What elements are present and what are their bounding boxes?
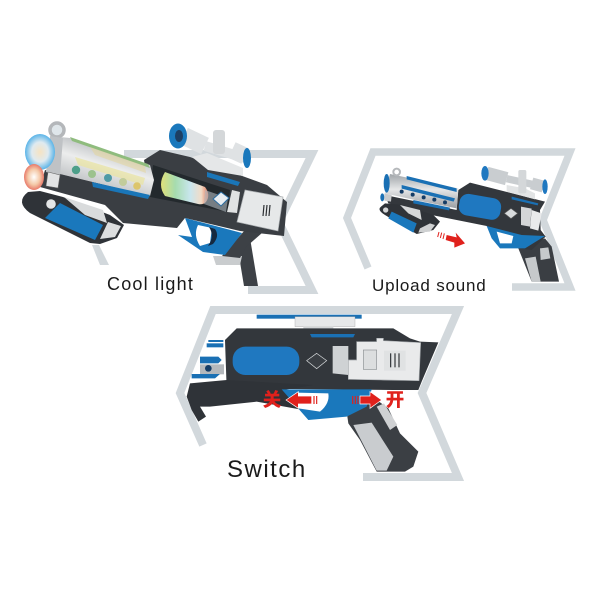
switch arrow: on	[353, 392, 382, 408]
arrow: insert direction	[438, 232, 465, 248]
label: switch: Switch	[227, 456, 307, 483]
light beam	[204, 190, 228, 212]
grip silver insert	[525, 257, 541, 282]
panel: cool light	[22, 123, 312, 294]
pump hole	[383, 207, 388, 213]
box vents	[391, 353, 399, 367]
grip	[518, 238, 559, 282]
pump blue panel	[45, 203, 103, 240]
label: upload sound: Upload sound	[372, 276, 487, 295]
pump silver panel	[64, 197, 107, 223]
trigger opening	[297, 393, 329, 412]
barrel holes	[400, 190, 447, 204]
chevron frame: cool light	[124, 154, 312, 290]
scope mount	[507, 185, 535, 199]
grip stem	[240, 238, 258, 286]
logo badge	[307, 353, 327, 369]
grip	[347, 400, 418, 472]
barrel colour streak	[75, 157, 145, 185]
pump silver panel	[400, 205, 422, 220]
barrel colour streak 2	[90, 147, 146, 173]
gun: light-up blaster	[22, 123, 287, 286]
chevron frame: upload sound	[347, 152, 570, 287]
chevron lower-left stub	[92, 245, 109, 265]
panel: upload sound	[347, 152, 570, 295]
barrel lights	[72, 166, 141, 190]
scope	[169, 124, 251, 168]
barrel clip	[46, 172, 60, 188]
slider	[227, 190, 240, 213]
gun body	[225, 328, 438, 390]
label: off character: 关	[263, 390, 281, 410]
label: cool light: Cool light	[107, 274, 194, 294]
blue panel	[233, 347, 299, 375]
translucent barrel	[60, 137, 154, 196]
muzzle lights	[24, 134, 55, 190]
barrel ring	[50, 123, 64, 137]
pump tip	[100, 222, 121, 239]
scope	[481, 166, 548, 194]
pump tip	[418, 223, 435, 233]
logo badge	[213, 192, 229, 206]
rear box	[237, 190, 283, 231]
barrel stubs	[192, 340, 224, 378]
grip silver base	[213, 256, 242, 265]
barrel ring	[393, 169, 400, 175]
barrel green edge	[70, 137, 150, 168]
gun: switch close-up	[187, 315, 438, 472]
trigger opening	[497, 232, 513, 243]
box recess	[363, 350, 377, 369]
under-barrel pump	[22, 191, 124, 244]
scope mount	[192, 153, 243, 176]
blue grip panel	[457, 193, 503, 221]
trigger guard	[178, 218, 242, 255]
logo badge	[504, 208, 518, 219]
grip top insert	[540, 247, 550, 260]
trigger guard	[282, 389, 372, 420]
trigger guard	[487, 226, 545, 248]
lower rail	[187, 380, 313, 422]
pump hole	[46, 199, 56, 209]
top rail stripe	[207, 172, 240, 186]
gun body	[40, 150, 287, 236]
rear box vents	[263, 205, 270, 216]
label: on character: 开	[386, 390, 404, 410]
scope base	[257, 315, 362, 333]
rear box	[348, 338, 421, 381]
rear white panel	[530, 210, 542, 231]
gun: upload sound blaster	[380, 166, 559, 282]
barrel clip	[384, 193, 392, 202]
barrel blue stripes	[380, 174, 457, 210]
box vents panel	[384, 351, 406, 371]
light chamber	[161, 172, 208, 204]
grip highlight	[377, 403, 397, 430]
grip wedge	[222, 230, 262, 258]
barrel	[385, 174, 458, 208]
rear panel	[521, 207, 532, 227]
pump blue panel	[388, 212, 417, 233]
top stripe	[512, 197, 538, 205]
pump	[380, 203, 440, 234]
gun body	[385, 183, 546, 250]
panel: switch	[180, 310, 458, 483]
trigger opening	[196, 225, 212, 246]
grip silver insert	[353, 423, 393, 471]
chevron frame: switch	[180, 310, 458, 477]
top stripe	[310, 334, 355, 337]
trigger	[208, 227, 217, 246]
chamber window	[150, 165, 230, 212]
barrel collar	[46, 136, 63, 176]
switch arrow: off	[286, 392, 317, 408]
side rail stripe	[92, 182, 150, 199]
rear slider	[333, 346, 348, 375]
